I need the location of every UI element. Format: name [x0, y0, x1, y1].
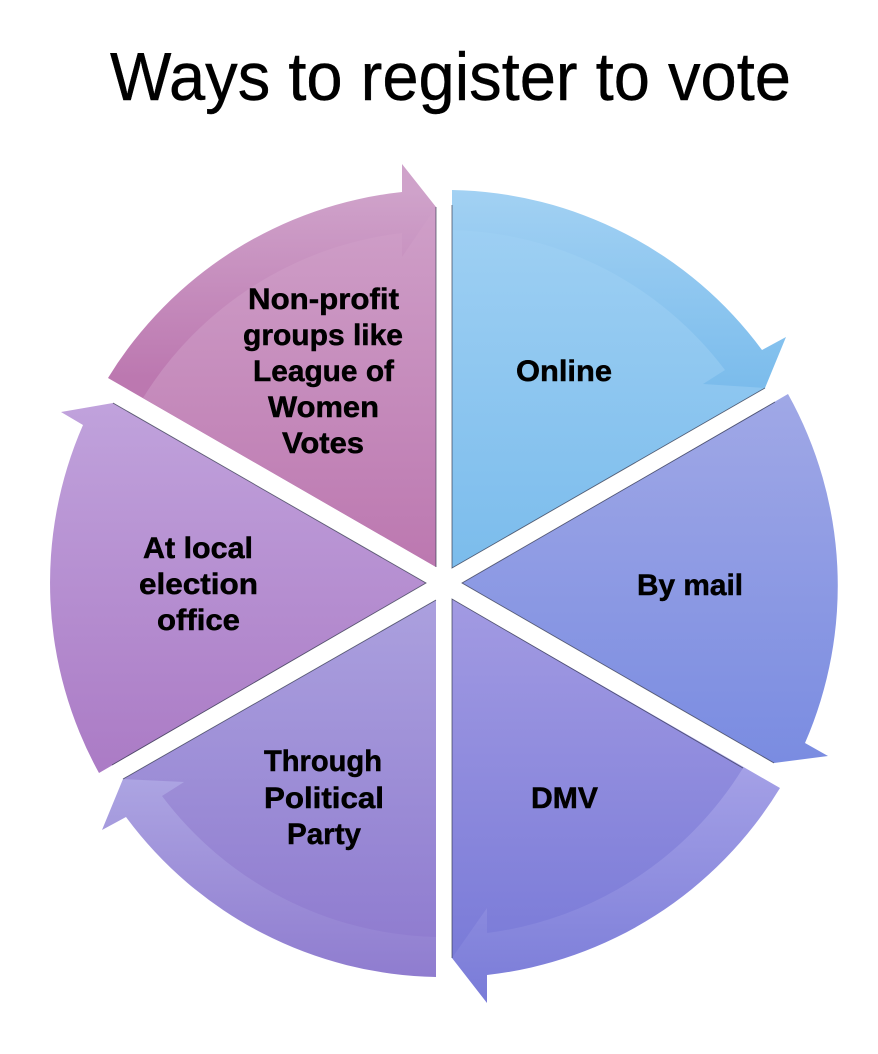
- label: At local election office: At local: [143, 532, 253, 565]
- inner sector: Online: [452, 230, 765, 568]
- label: Non-profit groups: Votes: [282, 427, 364, 460]
- panel: Online segment: [452, 190, 786, 568]
- panel: By mail segment: [462, 394, 838, 763]
- label: By mail: By mail: [637, 569, 743, 602]
- label: Through Political Party: Party: [287, 818, 361, 851]
- label: Non-profit groups: Women: [268, 391, 379, 424]
- arrow band: DMV: [452, 599, 780, 1003]
- panel: At local election office segment: [50, 403, 426, 773]
- label: At local election office: election: [139, 568, 258, 601]
- label: DMV: DMV: [531, 782, 598, 815]
- sector arrow: By mail: [462, 394, 838, 763]
- label: Non-profit groups: League of: [253, 355, 395, 388]
- label: At local election office: office: [157, 604, 240, 637]
- label: Online: Online: [516, 355, 612, 388]
- inner sector: DMV: [452, 599, 743, 958]
- label: Through Political Party: Through: [264, 745, 382, 778]
- arrow band: Non-profit groups: [108, 164, 436, 567]
- arrow band: Online: [452, 190, 786, 568]
- label: Non-profit groups: Non-profit: [248, 283, 399, 316]
- label: Through Political Party: Political: [264, 782, 384, 815]
- title: Ways to register to vote: [110, 39, 791, 115]
- panel: Through Political Party segment: [102, 600, 436, 977]
- sector arrow: At local election office: [50, 403, 426, 773]
- arrow band: Through Political Party: [102, 600, 436, 977]
- panel: DMV segment: [452, 599, 780, 1003]
- inner sector: Non-profit groups: [143, 207, 436, 567]
- panel: Non-profit groups segment: [108, 164, 436, 567]
- label: Non-profit groups: groups like: [243, 319, 403, 352]
- inner sector: Through Political Party: [123, 600, 436, 937]
